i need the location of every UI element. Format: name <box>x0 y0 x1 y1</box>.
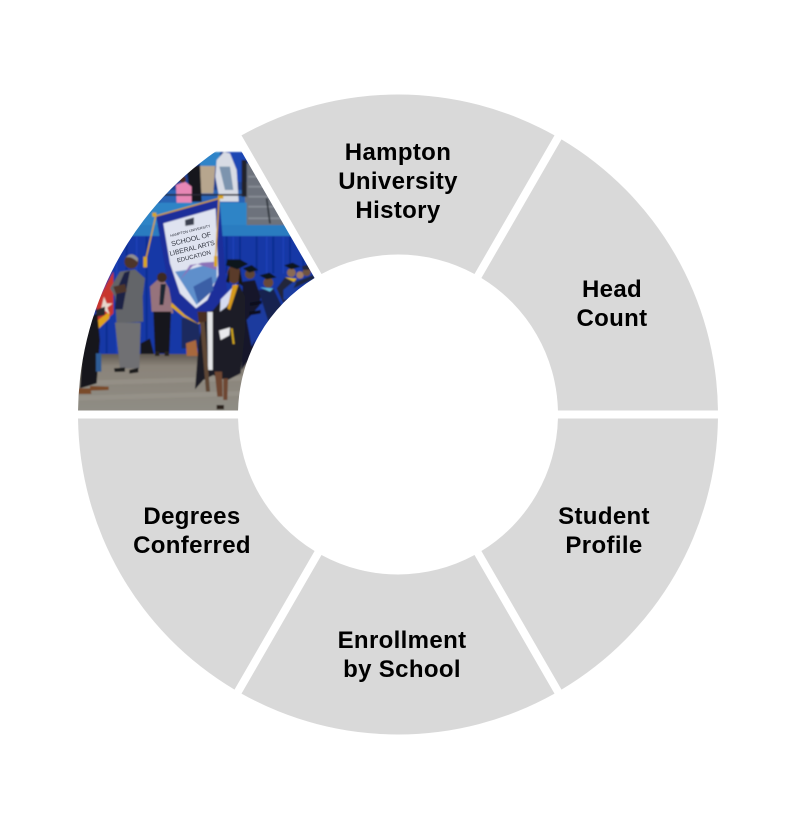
banner lettering: HAMPTON UNIVERSITY <box>170 224 211 238</box>
segment: Student Profile: Profile <box>565 532 643 559</box>
banner lettering <box>170 224 214 262</box>
segment: Student Profile: Student <box>558 503 650 530</box>
donut navigation diagram <box>78 94 718 734</box>
segment: Enrollment by School: by School <box>343 656 461 683</box>
segment: Degrees Conferred <box>78 418 315 690</box>
segment: Student Profile <box>481 418 718 690</box>
segment: Enrollment by School: Enrollment <box>338 627 466 654</box>
segment: Head Count <box>481 139 718 410</box>
segment: Head Count: Head <box>582 276 642 303</box>
banner lettering: EDUCATION <box>176 250 212 264</box>
photo segment: graduation procession with banner <box>70 152 330 414</box>
segment: Degrees Conferred: Degrees <box>143 503 241 530</box>
banner lettering: SCHOOL OF <box>171 232 212 248</box>
segment: Enrollment by School <box>242 555 554 734</box>
segment: Degrees Conferred: Conferred <box>133 532 251 559</box>
segment: Hampton University History: History <box>355 197 441 224</box>
segment: Hampton University History: University <box>338 168 458 195</box>
segment: Hampton University History <box>242 95 554 274</box>
segment: Head Count: Count <box>576 305 648 332</box>
banner lettering: LIBERAL ARTS <box>169 240 216 258</box>
segment: Hampton University History: Hampton <box>345 139 451 166</box>
